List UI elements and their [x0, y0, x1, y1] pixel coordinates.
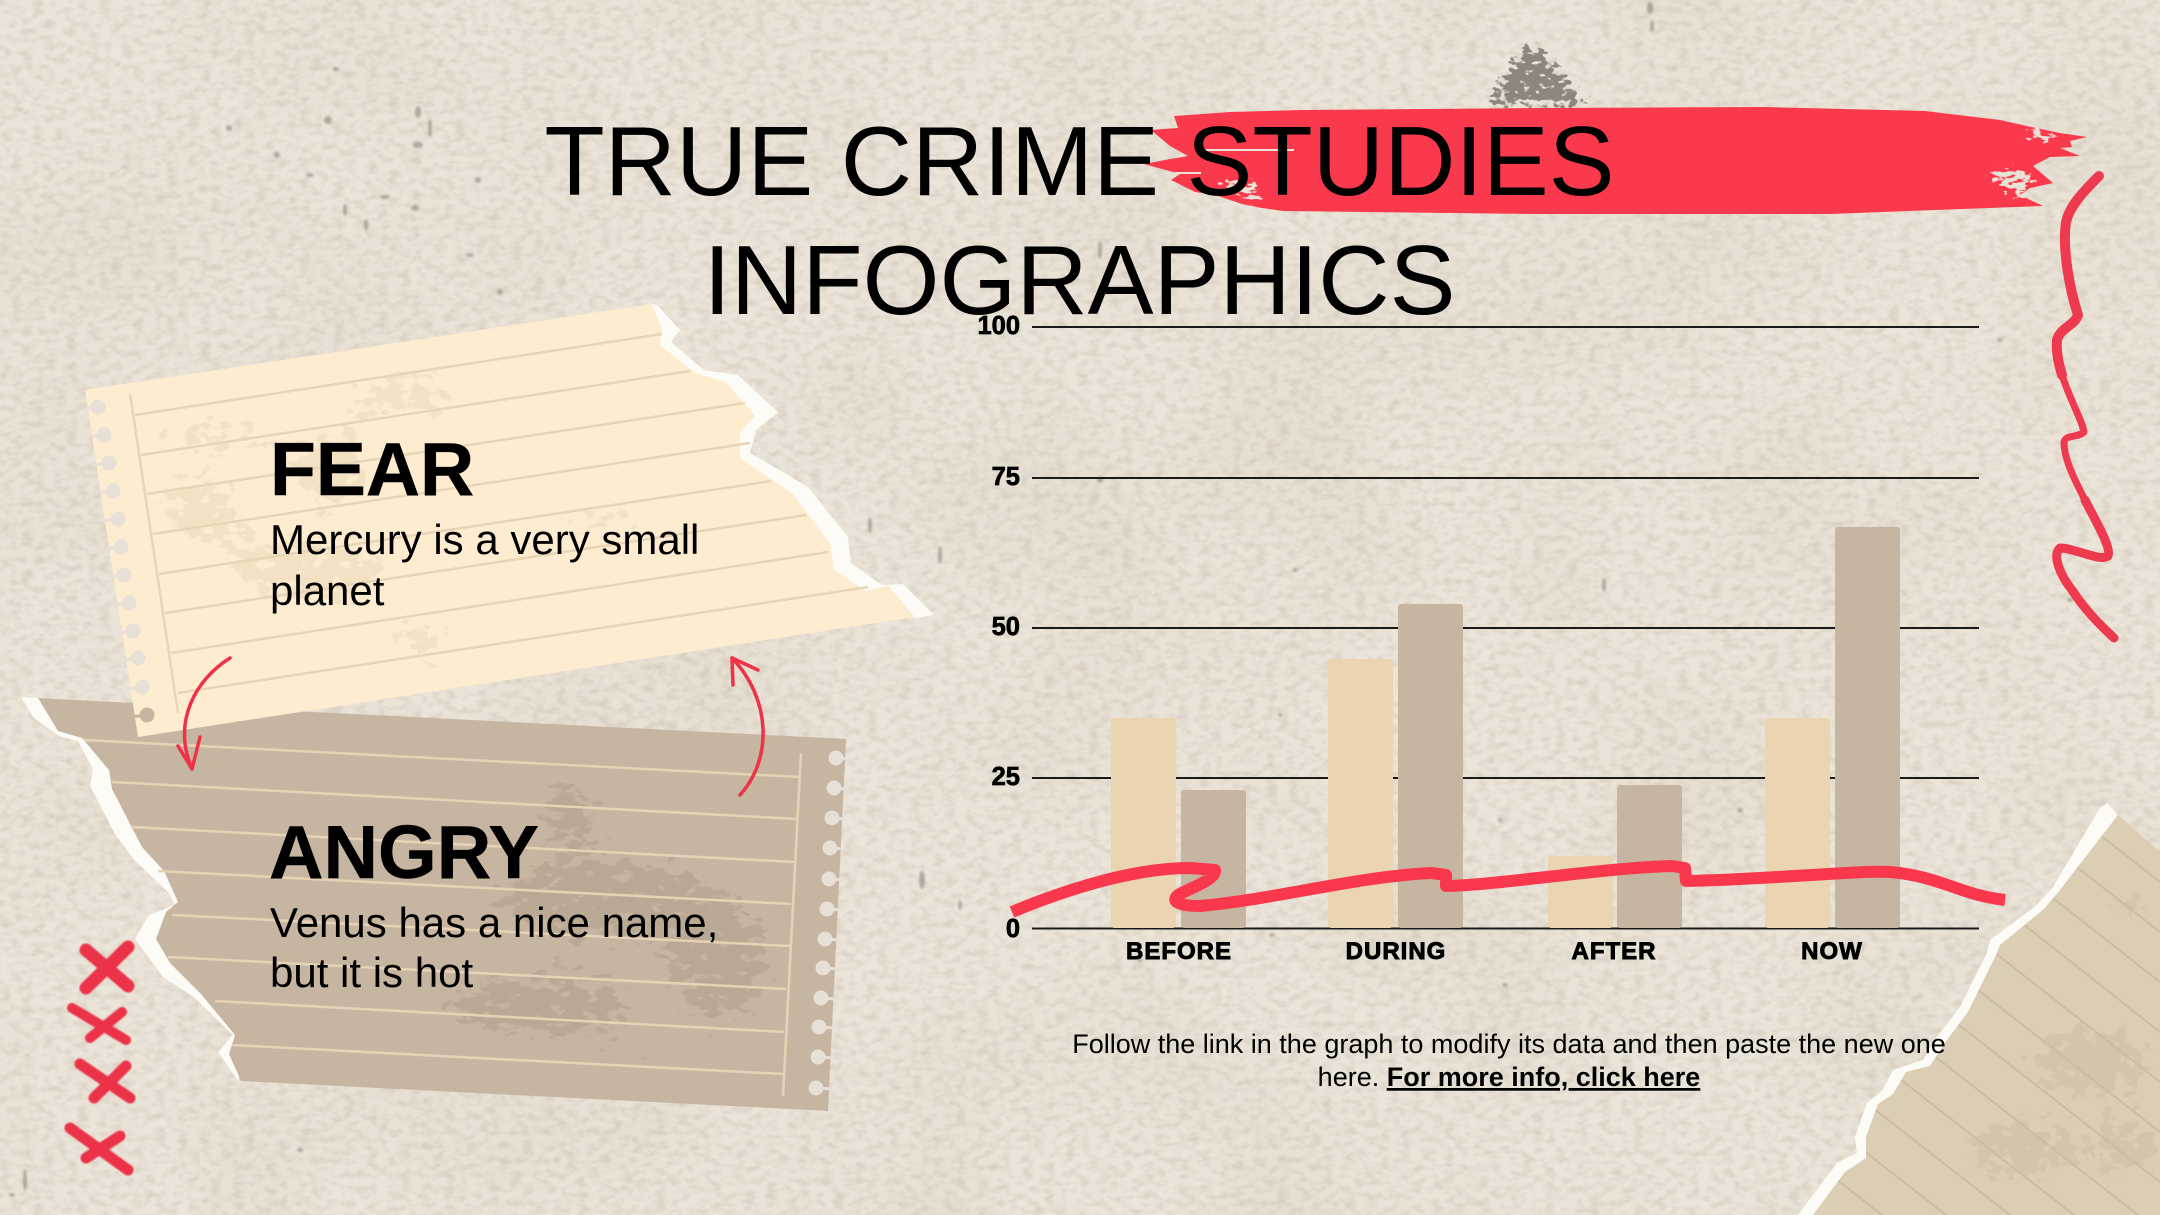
y axis labels [977, 312, 1020, 943]
y axis labels: 100 [977, 312, 1020, 340]
torn paper: bottom right corner [1798, 803, 2160, 1215]
heading: FEAR: FEAR [270, 427, 474, 511]
note text below chart: For more info, click here [1387, 1062, 1700, 1092]
icon: red cross marks [70, 947, 130, 1170]
y axis labels: 0 [1006, 915, 1020, 943]
x axis labels [1126, 938, 1863, 965]
x axis labels: BEFORE [1126, 938, 1232, 965]
x axis labels: AFTER [1572, 938, 1656, 965]
text: FEAR description: Mercury is a very small [270, 516, 699, 563]
note card: FEAR [84, 303, 934, 737]
arrow: fear to angry [178, 658, 230, 769]
text: ANGRY description: Venus has a nice name, [270, 899, 718, 946]
y axis labels: 25 [992, 763, 1020, 791]
note text below chart: here. [1318, 1062, 1387, 1092]
y axis labels: 75 [992, 463, 1020, 491]
bars: NOW [1765, 527, 1900, 928]
x axis labels: NOW [1801, 938, 1863, 965]
red squiggle on right edge [2057, 176, 2114, 638]
bars: DURING [1328, 604, 1463, 928]
y axis labels: 50 [992, 613, 1020, 641]
bar chart [977, 312, 2005, 965]
heading: ANGRY: ANGRY [269, 810, 539, 894]
red wavy line over bars [1012, 866, 2005, 912]
red brush stroke behind title [1144, 107, 2087, 214]
title: INFOGRAPHICS [703, 225, 1456, 335]
title: TRUE CRIME STUDIES [544, 106, 1615, 216]
arrow: angry to fear [732, 658, 763, 795]
note text below chart: Follow the link in the graph to modify its data and then paste the new one [1072, 1029, 1946, 1059]
text: ANGRY description: but it is hot [270, 949, 473, 996]
grid lines [1032, 327, 1979, 928]
note card: ANGRY [21, 697, 850, 1111]
text: FEAR description: planet [270, 567, 385, 614]
bars: BEFORE [1111, 718, 1246, 928]
bars: AFTER [1548, 785, 1682, 928]
x axis labels: DURING [1346, 938, 1446, 965]
icon: notch on FEAR card [130, 709, 153, 721]
